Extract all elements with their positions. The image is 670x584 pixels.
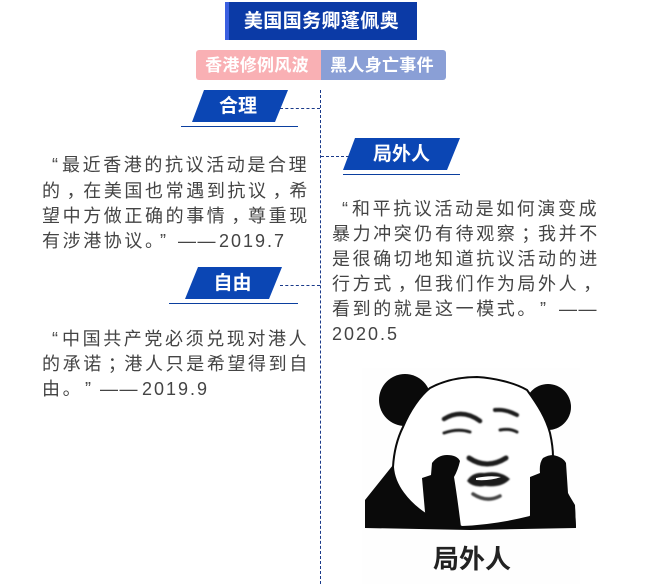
section heading: reasonable: 合理: [219, 96, 257, 117]
section heading: freedom: 自由: [213, 273, 252, 294]
quote: 2020.5: 看到的就是这一模式。: [332, 299, 538, 319]
quote: 2019.9: ”: [85, 379, 94, 399]
connector: reasonable: [280, 108, 320, 109]
rule under freedom heading: [169, 303, 298, 304]
tab: Hong Kong extradition: 香港修例风波: [205, 56, 309, 75]
quote: 2019.9: 由。: [42, 379, 83, 399]
quote: 2020.5: 行方式，但我们作为局外人，: [332, 274, 604, 294]
icon: panda body: [365, 465, 576, 530]
quote: 2020.5: 是很确切地知道抗议活动的进: [332, 249, 600, 269]
quote: 2019.7: ——: [178, 231, 217, 251]
quote: 2019.9: “: [52, 329, 61, 349]
quote: 2019.9: 2019.9: [142, 379, 209, 399]
section heading: freedom: [185, 267, 282, 299]
quote: 2020.5: ”: [540, 299, 549, 319]
title banner: 美国国务卿蓬佩奥: [244, 11, 399, 32]
quote: 2019.9: ——: [100, 379, 139, 399]
rule under reasonable heading: [181, 126, 298, 127]
quote: 2019.7: 2019.7: [219, 231, 286, 251]
section heading: outsider: [343, 138, 460, 170]
quote: 2019.7: 的，在美国也常遇到抗议，希: [42, 181, 310, 201]
connector: freedom: [280, 285, 320, 286]
quote: 2019.9: [42, 329, 310, 399]
quote: 2019.7: 望中方做正确的事情，尊重现: [42, 206, 310, 226]
icon: panda ears: [379, 374, 571, 430]
quote: 2019.9: 的承诺；港人只是希望得到自: [42, 354, 310, 374]
icon: panda hands: [422, 455, 576, 529]
rule under outsider heading: [343, 174, 460, 175]
title banner: [225, 2, 417, 40]
icon: panda face: [444, 410, 517, 499]
quote: 2019.7: 最近香港的抗议活动是合理: [62, 155, 309, 175]
tab: Hong Kong extradition: [196, 50, 321, 80]
section heading: outsider: 局外人: [373, 144, 430, 165]
quote: 2019.9: 中国共产党必须兑现对港人: [62, 329, 309, 349]
icon: panda head: [393, 377, 553, 527]
quote: 2019.7: “: [52, 155, 61, 175]
quote: 2020.5: 和平抗议活动是如何演变成: [352, 199, 599, 219]
tab: George Floyd incident: [321, 50, 446, 80]
tab: George Floyd incident: 黑人身亡事件: [330, 56, 434, 75]
connector: outsider: [321, 156, 349, 157]
quote: 2020.5: 暴力冲突仍有待观察；我并不: [332, 224, 600, 244]
quote: 2020.5: ——: [559, 299, 598, 319]
section heading: reasonable: [192, 90, 288, 122]
quote: 2019.7: 有涉港协议。: [42, 231, 166, 251]
quote: 2020.5: [332, 199, 604, 344]
icon: panda mouth: [467, 472, 510, 486]
quote: 2019.7: [42, 155, 310, 251]
caption: 局外人: [433, 544, 511, 574]
vertical dashed connector: [320, 90, 321, 584]
quote: 2020.5: “: [342, 199, 351, 219]
meme: panda with caption: [365, 374, 576, 574]
quote: 2019.7: ”: [160, 231, 169, 251]
quote: 2020.5: 2020.5: [332, 324, 399, 344]
